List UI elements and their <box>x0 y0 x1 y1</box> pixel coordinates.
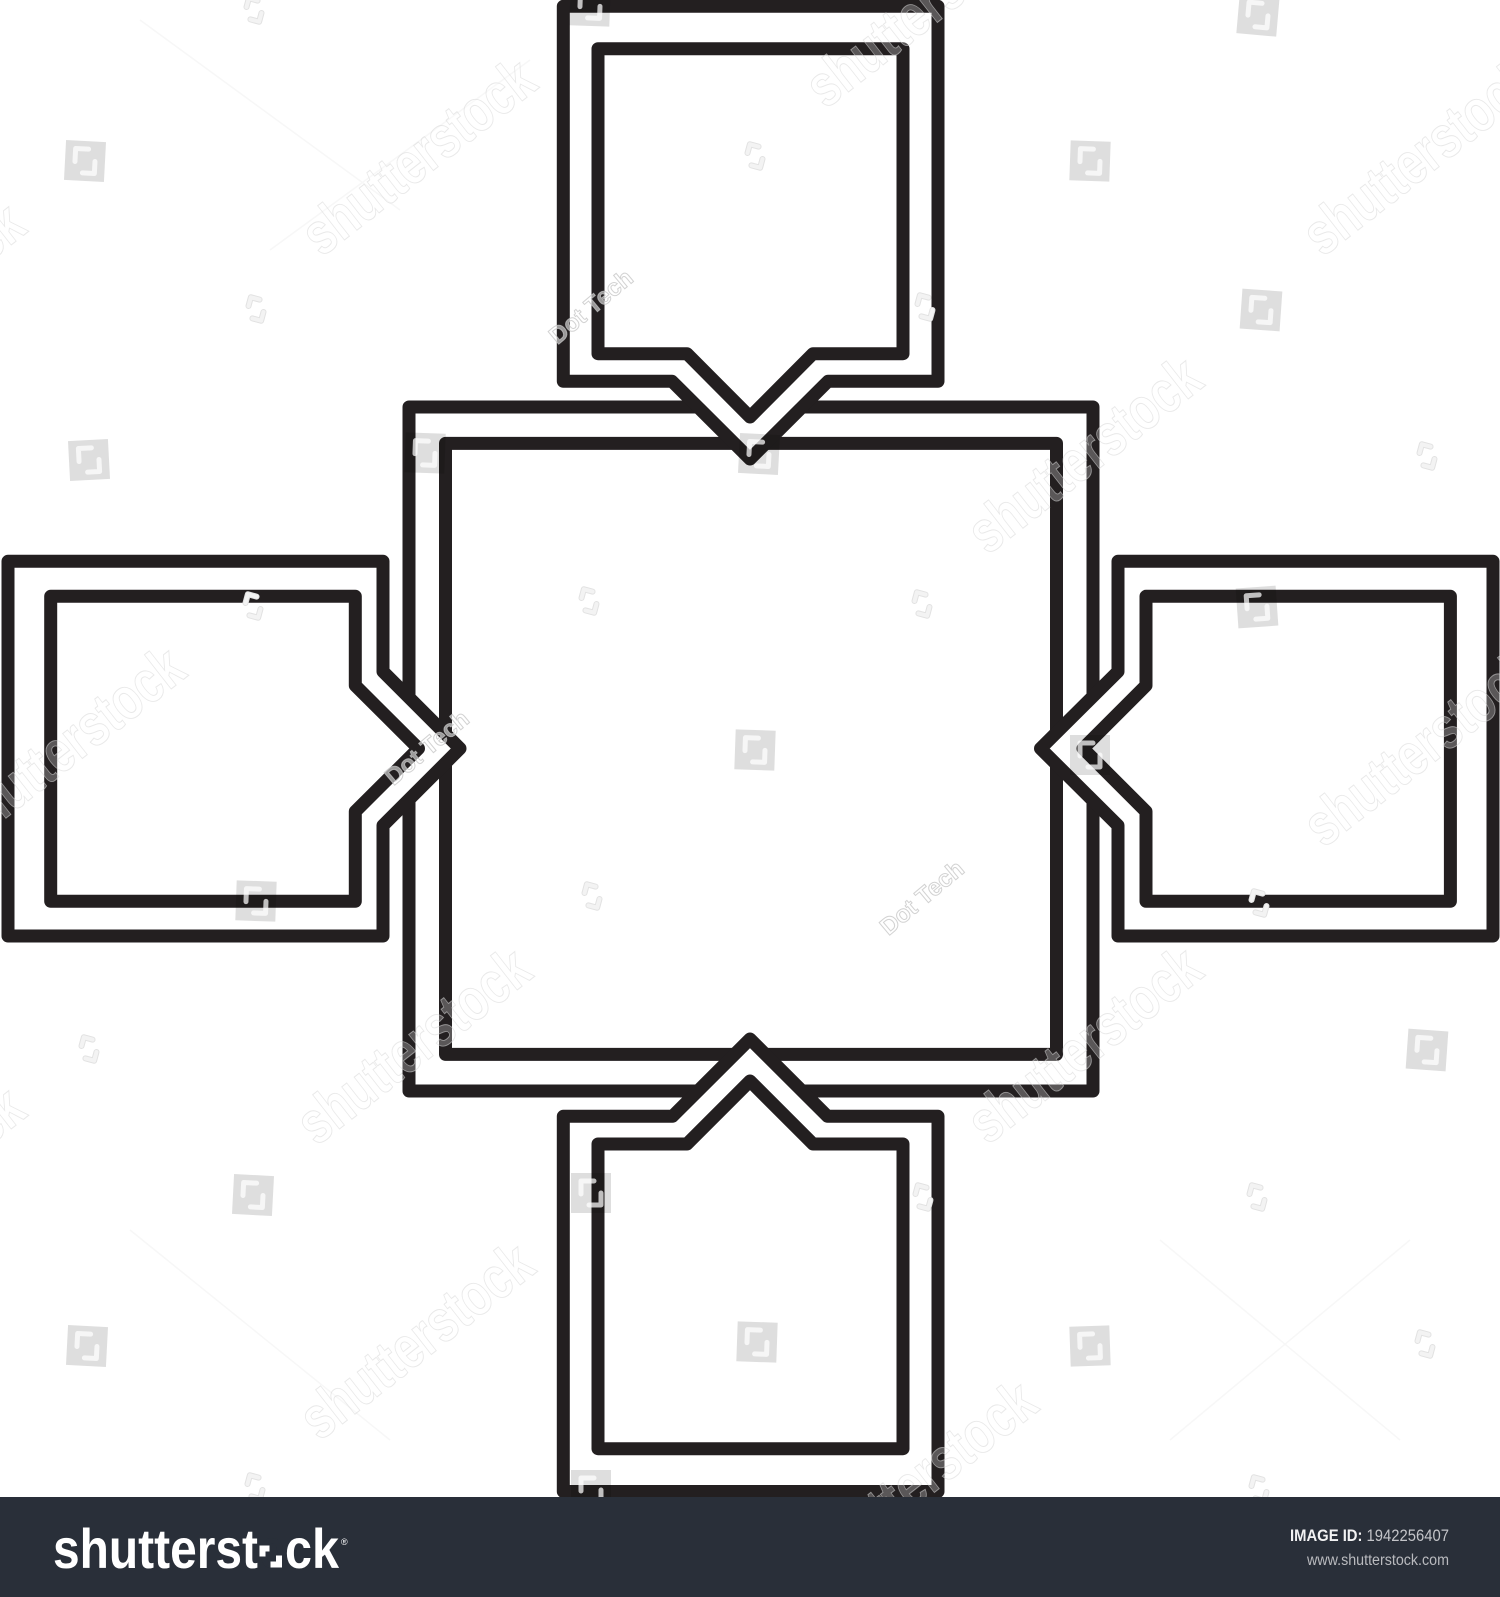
central square inner frame <box>446 443 1056 1054</box>
footer text: website: www.shutterstock.com <box>1306 1552 1449 1569</box>
panel: left box with rightward arrow <box>8 561 460 936</box>
watermark: Dot Tech labels: Dot Tech <box>544 264 639 350</box>
footer logo: shutterstock wordmark: ® <box>341 1537 348 1547</box>
panel: central square <box>409 407 1093 1091</box>
watermark: Dot Tech labels <box>380 264 970 941</box>
watermark: Dot Tech labels: Dot Tech <box>875 855 970 941</box>
footer logo: shutterstock wordmark: ck <box>285 1517 340 1580</box>
watermark: repeated shutterstock wordmarks: shutterstock <box>288 44 548 268</box>
panel: right box with leftward arrow <box>1040 561 1493 936</box>
right box outer outline <box>1040 561 1493 936</box>
footer bar <box>0 1497 1500 1597</box>
panel: top box with downward arrow <box>563 6 938 459</box>
panel: bottom box with upward arrow <box>563 1039 938 1492</box>
bottom box outer outline <box>563 1039 938 1492</box>
watermark: repeated shutterstock wordmarks: shutterstock <box>954 932 1214 1156</box>
bottom box inner outline <box>598 1081 903 1449</box>
watermark: repeated shutterstock wordmarks: shutterstock <box>954 342 1214 566</box>
left box inner outline <box>51 596 418 901</box>
right box inner outline <box>1083 596 1450 901</box>
footer text: image ID: IMAGE ID: 1942256407 <box>1290 1526 1449 1545</box>
top box outer outline <box>563 6 938 459</box>
top box inner outline <box>598 49 903 417</box>
watermark: repeated shutterstock wordmarks: shutterstock <box>286 1228 546 1452</box>
watermark: repeated shutterstock wordmarks: shutterstock <box>283 933 543 1157</box>
central square outer frame <box>409 407 1093 1091</box>
watermark: Dot Tech labels: Dot Tech <box>380 705 475 791</box>
footer logo: shutterstock wordmark: o <box>259 1517 285 1580</box>
footer logo: shutterstock wordmark: shutterst <box>53 1517 258 1580</box>
watermark: repeated shutterstock wordmarks: shutterstock <box>789 1366 1049 1590</box>
left box outer outline <box>8 561 460 936</box>
